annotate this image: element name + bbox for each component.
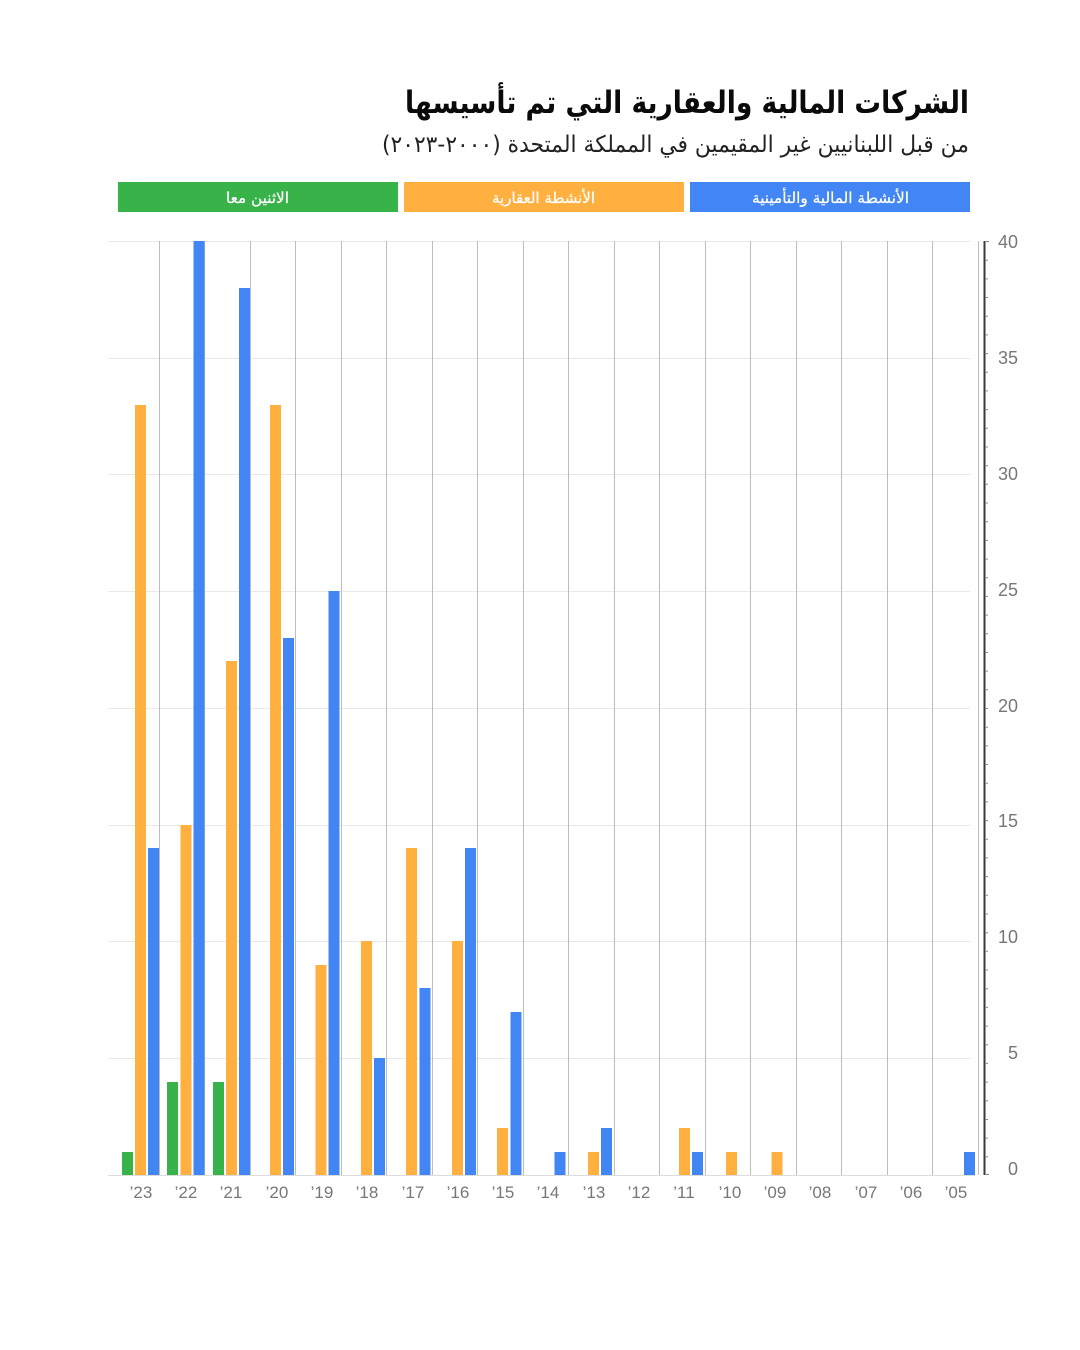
bars: 2020 [270, 405, 294, 1175]
bars: 2016 [452, 848, 476, 1175]
x axis labels: ’12 [628, 1183, 650, 1202]
bars: 2015 [497, 1012, 522, 1175]
x axis labels: ’18 [356, 1183, 378, 1202]
legend: financial and insurance activities [690, 182, 970, 212]
y axis labels: 40 [998, 232, 1018, 252]
y axis labels: 20 [998, 696, 1018, 716]
x axis labels: ’16 [447, 1183, 469, 1202]
y axis labels: 0 [1008, 1159, 1018, 1179]
bars: 2009 [772, 1152, 782, 1175]
x axis labels: ’11 [673, 1183, 695, 1202]
y axis labels: 35 [998, 348, 1018, 368]
bars: 2010 [726, 1152, 737, 1175]
y axis labels: 5 [1008, 1043, 1018, 1063]
y axis labels: 25 [998, 580, 1018, 600]
y axis labels: 15 [998, 811, 1018, 831]
bars: 2011 [679, 1128, 703, 1175]
x axis labels: ’09 [764, 1183, 786, 1202]
bars: 2005 [964, 1152, 975, 1175]
x axis labels: ’08 [809, 1183, 831, 1202]
bars: 2014 [554, 1152, 566, 1175]
x axis labels: ’15 [492, 1183, 514, 1202]
x axis labels: ’20 [266, 1183, 288, 1202]
y axis [984, 232, 1018, 1179]
x axis labels: ’13 [583, 1183, 605, 1202]
bar chart [108, 241, 978, 1176]
x axis labels: ’19 [311, 1183, 333, 1202]
legend: real estate activities [404, 182, 684, 212]
legend: both together: الاثنين معا [226, 189, 289, 207]
x axis labels: ’06 [900, 1183, 922, 1202]
legend: both together [118, 182, 398, 212]
x axis labels: ’05 [945, 1183, 967, 1202]
x axis labels: ’22 [175, 1183, 197, 1202]
bars: 2019 [316, 591, 340, 1175]
x axis labels: ’21 [220, 1183, 242, 1202]
y axis labels: 30 [998, 464, 1018, 484]
bars: 2017 [406, 848, 430, 1175]
y axis labels [998, 232, 1018, 1179]
bars: 2022 [167, 241, 204, 1175]
bars: 2013 [588, 1128, 612, 1175]
bars: 2023 [122, 405, 159, 1175]
subtitle: من قبل اللبنانيين غير المقيمين في المملكة المتحدة (٢٠٠٠-٢٠٢٣) [382, 132, 969, 158]
x axis labels: ’14 [537, 1183, 559, 1202]
legend: financial and insurance activities: الأنشطة المالية والتأمينية [752, 187, 909, 207]
x axis labels: ’17 [402, 1183, 424, 1202]
y axis labels: 10 [998, 927, 1018, 947]
x axis labels: ’23 [130, 1183, 152, 1202]
bars: 2021 [213, 288, 250, 1175]
title: الشركات المالية والعقارية التي تم تأسيسها [405, 82, 969, 121]
legend [118, 182, 970, 212]
bars: 2018 [361, 941, 385, 1175]
legend: real estate activities: الأنشطة العقارية [492, 188, 595, 207]
x axis labels: ’07 [855, 1183, 877, 1202]
x axis labels [130, 1183, 967, 1202]
x axis labels: ’10 [719, 1183, 741, 1202]
